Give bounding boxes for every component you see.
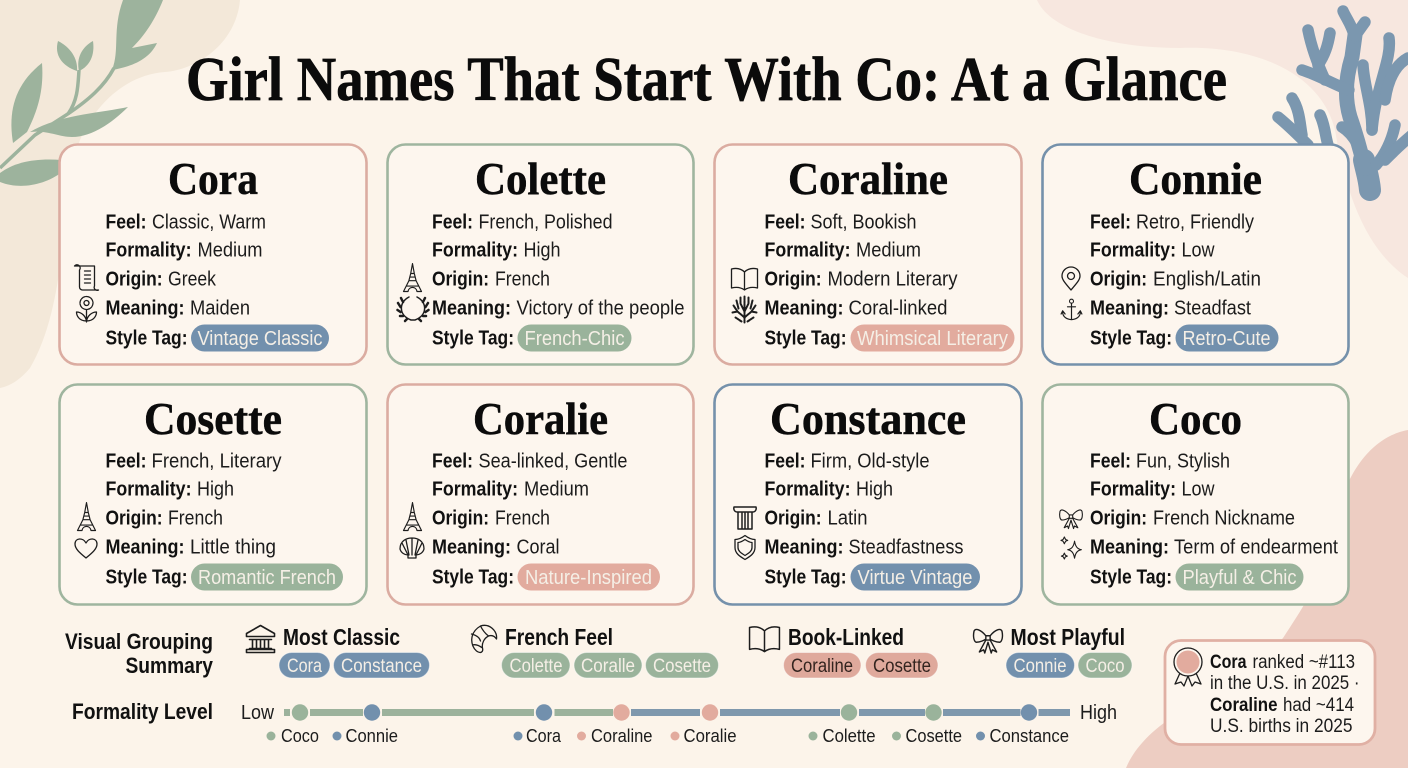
icon: anchor	[1061, 299, 1082, 320]
details: Cosette: French	[168, 507, 223, 529]
card: Coraline	[714, 144, 1022, 364]
name: Coralie: Coralie	[473, 393, 608, 444]
group: Book-Linked	[750, 624, 938, 678]
icon: bow	[1060, 510, 1082, 529]
scale end label: High: High	[1080, 702, 1117, 724]
group: Most Playful	[974, 624, 1132, 678]
icon: Eiffel tower	[404, 264, 422, 292]
details: Connie: Formality:	[1090, 239, 1176, 261]
pill: Cosette: Cosette	[873, 656, 931, 677]
title: Girl Names That Start With Co: At a Glance	[186, 46, 1227, 114]
icon: heart	[75, 539, 97, 558]
details: Colette: Victory of the people	[516, 297, 684, 319]
details: Coco: Term of endearment	[1174, 536, 1338, 558]
scale name labels: Coraline	[591, 725, 652, 746]
details: Coralie: Origin:	[432, 507, 489, 529]
details: Coco: Fun, Stylish	[1136, 450, 1230, 472]
details: Constance: High	[856, 478, 893, 500]
details: Connie: Retro, Friendly	[1136, 211, 1254, 233]
pill: Coco: Coco	[1086, 656, 1124, 677]
scale name labels: Coco	[281, 725, 319, 746]
details: Cora: Maiden	[190, 297, 250, 319]
details: Coco: Origin:	[1090, 507, 1147, 529]
details: Cora: Medium	[198, 239, 262, 261]
icon: open book	[732, 268, 758, 290]
details: Coco: Feel:	[1090, 450, 1131, 472]
details: Connie: Feel:	[1090, 211, 1131, 233]
card: Colette	[388, 144, 694, 364]
details: Constance: Firm, Old-style	[810, 450, 930, 472]
details: Connie: Meaning:	[1090, 297, 1169, 319]
details: Connie	[1090, 211, 1261, 349]
details: Coraline	[764, 211, 958, 349]
style tag: Romantic French: Romantic French	[198, 567, 336, 589]
callout text: in the U.S. in 2025 ·	[1210, 673, 1360, 694]
details: Coraline: Modern Literary	[828, 268, 958, 290]
details: Coco: Meaning:	[1090, 536, 1169, 558]
details: Colette: Style Tag:	[432, 327, 514, 349]
details: Coraline: Meaning:	[764, 297, 844, 319]
icon: sparkles	[1061, 537, 1081, 559]
details: Cora: Feel:	[106, 211, 146, 233]
style tag: Virtue Vintage: Virtue Vintage	[858, 567, 972, 589]
style tag: Nature-Inspired: Nature-Inspired	[525, 567, 652, 589]
scale name labels: Colette	[822, 725, 876, 746]
details: Constance: Steadfastness	[848, 536, 964, 558]
details: Cosette: French, Literary	[152, 450, 282, 472]
scale track	[284, 709, 1070, 716]
details: Cosette: Style Tag:	[106, 566, 188, 588]
details: Colette: High	[524, 239, 560, 261]
card: Coralie	[388, 384, 694, 604]
pill: Cora	[279, 652, 330, 678]
details: Connie: Origin:	[1090, 268, 1147, 290]
style tag: Retro-Cute: Retro-Cute	[1182, 328, 1270, 350]
details: Colette	[432, 211, 684, 349]
callout text: Coraline	[1210, 695, 1278, 716]
decoration: green leaf branch	[0, 0, 163, 186]
decorative blob: top left	[0, 0, 240, 388]
pill: Cosette: Cosette	[653, 656, 711, 677]
name: Colette: Colette	[475, 153, 606, 204]
group heading: French Feel: French Feel	[505, 624, 613, 650]
scale name labels: Cora	[526, 725, 562, 746]
details: Constance	[764, 450, 964, 588]
details: Colette: French	[495, 268, 550, 290]
scale points	[292, 704, 1037, 721]
scale name labels: Coralie	[684, 725, 736, 746]
pill: Constance: Constance	[341, 656, 422, 677]
card: Cosette	[60, 384, 366, 604]
card: Connie	[1042, 144, 1348, 364]
decorative blob: bottom right	[1126, 430, 1408, 768]
details: Connie: Style Tag:	[1090, 327, 1172, 349]
heading: Formality Level: Formality Level	[72, 699, 213, 724]
details: Cosette: High	[197, 478, 234, 500]
details: Coraline: Soft, Bookish	[810, 211, 916, 233]
icon: flower	[76, 296, 96, 322]
icon: Eiffel tower	[404, 503, 422, 530]
details: Cosette	[106, 450, 282, 588]
group: Most Classic	[246, 624, 430, 678]
details: Coraline: Formality:	[764, 239, 850, 261]
heading: Visual Grouping Summary	[65, 629, 214, 678]
style tag: French-Chic: French-Chic	[524, 328, 624, 350]
details: Cora: Style Tag:	[106, 327, 188, 349]
details: Connie: Steadfast	[1174, 297, 1251, 319]
pill: Connie: Connie	[1014, 656, 1066, 677]
card: Constance	[714, 384, 1022, 604]
callout text: U.S. births in 2025	[1210, 716, 1352, 737]
icon: shield	[735, 536, 755, 560]
name: Coco: Coco	[1149, 393, 1242, 444]
callout text	[1210, 652, 1360, 737]
details: Coralie: Style Tag:	[432, 566, 514, 588]
group heading: Book-Linked: Book-Linked	[788, 624, 904, 650]
details: Coraline: Feel:	[764, 211, 806, 233]
details: Constance: Origin:	[764, 507, 822, 529]
details: Constance: Feel:	[764, 450, 806, 472]
details: Connie: English/Latin	[1153, 268, 1261, 290]
details: Cosette: Little thing	[190, 536, 276, 558]
scale name labels: Constance	[990, 725, 1069, 746]
card: Coco	[1042, 384, 1348, 604]
icon: scroll	[74, 265, 98, 290]
details: Coralie: French	[495, 507, 550, 529]
name: Constance: Constance	[770, 393, 966, 444]
details: Cosette: Formality:	[106, 478, 192, 500]
details: Coralie: Coral	[516, 536, 560, 558]
details: Cora: Classic, Warm	[152, 211, 266, 233]
details: Coco: French Nickname	[1153, 507, 1295, 529]
group heading: Most Classic: Most Classic	[283, 624, 400, 650]
details: Cosette: Meaning:	[106, 536, 184, 558]
details: Colette: Formality:	[432, 239, 518, 261]
group heading: Most Playful: Most Playful	[1010, 624, 1125, 650]
icon: column	[734, 507, 756, 529]
details: Coralie	[432, 450, 628, 588]
scale name labels: Cosette	[906, 725, 962, 746]
details: Cora	[106, 211, 266, 349]
icon: classical temple	[246, 626, 274, 652]
heading: Visual Grouping Summary: Summary	[126, 653, 214, 678]
details: Cora: Meaning:	[106, 297, 184, 319]
icon: laurel wreath	[398, 297, 428, 321]
name: Coraline: Coraline	[788, 153, 948, 204]
details: Cora: Greek	[168, 268, 217, 290]
details: Coralie: Formality:	[432, 478, 518, 500]
details: Constance: Latin	[828, 507, 868, 529]
icon: croissant	[472, 625, 497, 652]
name: Cosette: Cosette	[144, 393, 282, 444]
details: Coco	[1090, 450, 1338, 588]
scale name labels: Connie	[346, 725, 398, 746]
callout text: ranked ~#113	[1252, 652, 1355, 673]
details: Connie: Low	[1182, 239, 1215, 261]
group: French Feel	[472, 624, 718, 678]
details: Constance: Formality:	[764, 478, 850, 500]
details: Coraline: Style Tag:	[764, 327, 846, 349]
card: Cora	[60, 144, 366, 364]
callout text: had ~414	[1283, 695, 1354, 716]
details: Coralie: Meaning:	[432, 536, 511, 558]
pill: Coralle: Coralle	[581, 656, 635, 677]
pill: Coraline: Coraline	[791, 656, 853, 677]
icon: bow	[974, 629, 1002, 653]
details: Cosette: Origin:	[106, 507, 162, 529]
scale name labels	[266, 725, 1069, 746]
icon: coral	[732, 296, 756, 322]
details: Coco: Formality:	[1090, 478, 1176, 500]
details: Colette: Meaning:	[432, 297, 511, 319]
icon: seashell	[400, 538, 424, 558]
details: Coralie: Medium	[524, 478, 589, 500]
details: Coco: Style Tag:	[1090, 566, 1172, 588]
details: Colette: Feel:	[432, 211, 473, 233]
details: Colette: French, Polished	[478, 211, 612, 233]
style tag: Playful & Chic: Playful & Chic	[1182, 567, 1296, 589]
icon: map pin	[1062, 267, 1080, 290]
icon: Eiffel tower	[78, 503, 96, 530]
name: Cora: Cora	[168, 153, 258, 204]
pill: Cora: Cora	[287, 656, 322, 677]
pill: Coco	[1078, 652, 1132, 678]
details: Constance: Meaning:	[764, 536, 844, 558]
details: Colette: Origin:	[432, 268, 489, 290]
details: Coraline: Coral-linked	[848, 297, 948, 319]
details: Coco: Low	[1182, 478, 1215, 500]
style tag: Whimsical Literary: Whimsical Literary	[857, 328, 1008, 350]
name: Connie: Connie	[1129, 153, 1262, 204]
callout text: Cora	[1210, 652, 1247, 673]
details: Coraline: Origin:	[764, 268, 822, 290]
details: Coraline: Medium	[856, 239, 921, 261]
details: Constance: Style Tag:	[764, 566, 846, 588]
scale end label: Low: Low	[241, 702, 274, 724]
details: Coralie: Sea-linked, Gentle	[478, 450, 628, 472]
heading: Visual Grouping Summary: Visual Grouping	[65, 629, 213, 654]
style tag: Vintage Classic: Vintage Classic	[198, 328, 322, 350]
pill: Colette: Colette	[510, 656, 562, 677]
details: Cora: Formality:	[106, 239, 192, 261]
icon: award ribbon	[1174, 648, 1202, 686]
decorative blob: top right	[1037, 0, 1408, 278]
decoration: blue coral	[1278, 11, 1408, 190]
callout: popularity fact	[1165, 640, 1375, 744]
formality scale	[241, 702, 1117, 746]
details: Coralie: Feel:	[432, 450, 473, 472]
icon: open book	[750, 627, 779, 652]
details: Cosette: Feel:	[106, 450, 146, 472]
details: Cora: Origin:	[106, 268, 162, 290]
